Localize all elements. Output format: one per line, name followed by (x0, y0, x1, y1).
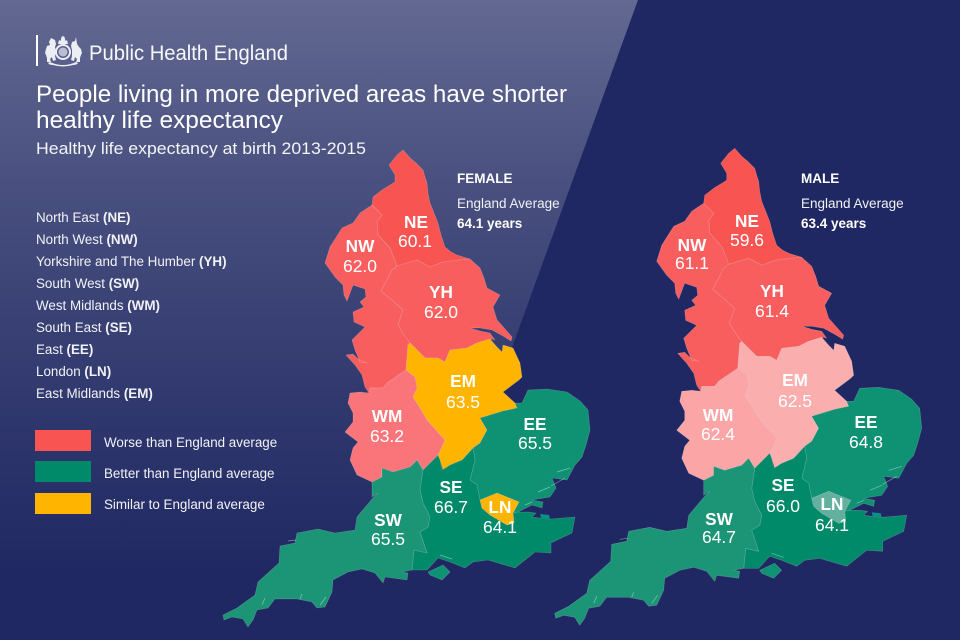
label: EM 62.5 (778, 370, 812, 411)
label: SW 64.7 (702, 509, 736, 547)
label: EM 63.5: 63.5 (446, 392, 480, 412)
label: NE 60.1: NE (404, 212, 428, 232)
male caption: 63.4 years (801, 216, 866, 231)
region: Yorkshire and The Humber (male) (713, 257, 844, 360)
label: YH 62.0 (424, 282, 458, 322)
legend: worse: Worse than England average (104, 435, 277, 450)
label: WM 62.4: 62.4 (701, 424, 735, 444)
region: North West (female) (325, 205, 410, 393)
legend: better (35, 461, 274, 482)
label: SW 65.5 (371, 510, 405, 549)
region key list: West Midlands (WM) (36, 298, 160, 313)
region: East of England (male) (802, 387, 922, 511)
label: NW 62.0 (343, 236, 377, 276)
female map (223, 150, 590, 627)
label: EM 62.5: EM (782, 370, 808, 390)
colour legend (35, 430, 277, 514)
label: YH 61.4: YH (760, 281, 784, 301)
region key list: South West (SW) (36, 276, 139, 291)
legend: better: Better than England average (104, 466, 274, 481)
region key list: East Midlands (EM) (36, 386, 153, 401)
label: EM 63.5 (446, 371, 480, 412)
male caption: MALE (801, 171, 839, 186)
region key list: North West (NW) (36, 232, 138, 247)
label: EE 64.8: EE (855, 412, 877, 432)
label: EE 65.5 (518, 414, 552, 453)
label: LN 64.1: 64.1 (483, 517, 517, 537)
label: EM 62.5: 62.5 (778, 391, 812, 411)
region key list: London (LN) (36, 364, 111, 379)
title: healthy life expectancy (36, 107, 283, 134)
region: Isle of Wight (female) (428, 565, 450, 580)
female caption: FEMALE (457, 171, 512, 186)
male caption: England Average (801, 196, 904, 211)
region: London (male) (812, 491, 851, 523)
label: NE 60.1: 60.1 (398, 231, 432, 251)
icon: royal crest (45, 36, 82, 66)
label: NE 59.6: 59.6 (730, 230, 764, 250)
label: SE 66.0 (766, 475, 800, 516)
label: NW 62.0: NW (346, 236, 375, 256)
label: SE 66.0: 66.0 (766, 496, 800, 516)
label: NE 59.6: NE (735, 211, 759, 231)
region: East Midlands (male) (738, 337, 854, 468)
label: SE 66.0: SE (772, 475, 794, 495)
label: SW 65.5: 65.5 (371, 529, 405, 549)
label: NW 61.1 (675, 235, 709, 273)
label: LN 64.1: 64.1 (815, 515, 849, 535)
region: North West (male) (657, 203, 742, 391)
label: WM 63.2 (370, 406, 404, 446)
label: EE 64.8 (849, 412, 883, 452)
female caption: England Average (457, 196, 560, 211)
logo: Public Health England: Public Health England (89, 41, 288, 65)
region key list: East (EE) (36, 342, 93, 357)
label: SE 66.7: SE (440, 477, 462, 497)
region: South East (male) (744, 446, 907, 568)
label: WM 62.4: WM (703, 405, 733, 425)
label: NE 60.1 (398, 212, 432, 251)
label: EE 65.5: EE (524, 414, 546, 434)
estuary details (594, 466, 902, 603)
region: South West (female) (223, 460, 430, 627)
label: LN 64.1 (483, 497, 517, 537)
region: West Midlands (female) (345, 370, 445, 482)
region: West Midlands (male) (677, 368, 777, 480)
region key list (36, 210, 227, 401)
label: NW 61.1: NW (678, 235, 707, 255)
region: South West (male) (555, 458, 762, 625)
region: East of England (female) (470, 389, 590, 513)
legend: similar (35, 493, 265, 514)
label: NW 61.1: 61.1 (675, 253, 709, 273)
legend: similar: Similar to England average (104, 497, 265, 512)
label: SE 66.7 (434, 477, 468, 517)
label: SW 64.7: 64.7 (702, 527, 736, 547)
background light beam (0, 0, 638, 640)
label: WM 63.2: WM (372, 406, 402, 426)
label: WM 63.2: 63.2 (370, 426, 404, 446)
female caption: 64.1 years (457, 216, 522, 231)
label: NW 62.0: 62.0 (343, 256, 377, 276)
female caption (457, 171, 560, 231)
subtitle: Healthy life expectancy at birth 2013-2015 (36, 139, 366, 158)
label: EM 63.5: EM (450, 371, 476, 391)
region key list: Yorkshire and The Humber (YH) (36, 254, 227, 269)
label: WM 62.4 (701, 405, 735, 444)
label: SW 64.7: SW (705, 509, 734, 529)
logo: Public Health England (36, 35, 288, 66)
region: South East (female) (412, 448, 575, 570)
region: London (female) (480, 493, 519, 525)
label: YH 61.4 (755, 281, 789, 321)
region key list: North East (NE) (36, 210, 131, 225)
male caption (801, 171, 904, 231)
region: North East (male) (704, 148, 802, 265)
label: EE 65.5: 65.5 (518, 433, 552, 453)
label: LN 64.1: LN (821, 494, 843, 514)
label: NE 59.6 (730, 211, 764, 250)
estuary details (262, 468, 570, 605)
label: SE 66.7: 66.7 (434, 497, 468, 517)
region: Isle of Wight (male) (760, 563, 782, 578)
label: LN 64.1: LN (489, 497, 511, 517)
title (36, 81, 567, 134)
title: People living in more deprived areas have shorter (36, 81, 567, 108)
label: YH 61.4: 61.4 (755, 301, 789, 321)
label: YH 62.0: 62.0 (424, 302, 458, 322)
label: EE 64.8: 64.8 (849, 432, 883, 452)
label: YH 62.0: YH (429, 282, 453, 302)
legend: worse (35, 430, 277, 451)
label: SW 65.5: SW (374, 510, 403, 530)
male map (555, 148, 922, 625)
region key list: South East (SE) (36, 320, 132, 335)
region: North East (female) (372, 150, 470, 267)
region: East Midlands (female) (406, 339, 522, 470)
label: LN 64.1 (815, 494, 849, 535)
region: Yorkshire and The Humber (female) (381, 259, 512, 362)
